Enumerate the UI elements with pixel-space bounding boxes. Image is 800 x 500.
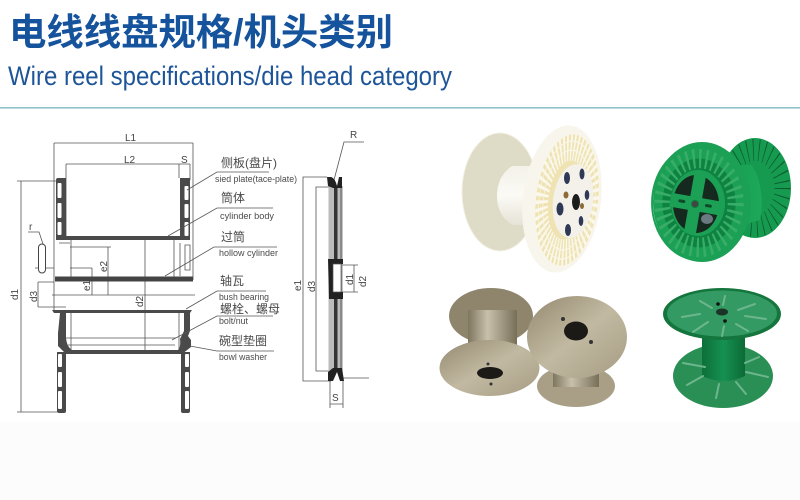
diagram: reel cross-section: d2 — [135, 295, 146, 307]
photo: green plastic reel — [652, 138, 791, 262]
front flange ribs — [652, 146, 746, 260]
diagram: reel cross-section: d3 — [29, 290, 40, 302]
back flange ribs — [728, 150, 782, 226]
diagram: reel cross-section: S — [181, 155, 188, 166]
page background — [0, 422, 800, 500]
left reel front flange — [440, 340, 540, 396]
glimpse through opening — [701, 214, 713, 224]
diagram: reel cross-section: d1 — [10, 288, 21, 300]
lower flange — [673, 344, 773, 408]
back flange — [719, 138, 791, 238]
label: hollow cylinder: 过筒 — [221, 229, 245, 244]
ribbed face — [528, 131, 606, 269]
flange slots — [58, 183, 189, 409]
drum — [702, 335, 745, 381]
leader lines — [165, 172, 277, 351]
label: cylinder body: cylinder body — [220, 211, 275, 221]
label: bowl washer: 碗型垫圈 — [219, 333, 267, 348]
bush bearing — [52, 310, 192, 313]
upper right flange — [180, 178, 190, 240]
diagram: plate section view: d1 — [345, 273, 356, 285]
label: side plate: 侧板(盘片) — [221, 155, 277, 170]
drum — [715, 165, 762, 232]
photo: green metal reel — [663, 288, 781, 408]
hub ring — [671, 170, 725, 236]
top flange — [663, 288, 781, 340]
photo: cream plastic reel — [462, 121, 610, 277]
plate web — [328, 186, 342, 372]
diagram: plate section view — [293, 130, 369, 408]
lower right flange — [181, 352, 190, 413]
diagram: plate section view: S — [332, 393, 339, 404]
diagram: reel cross-section: e1 — [82, 279, 93, 291]
left reel drum — [468, 310, 517, 365]
diagram: reel cross-section: e2 — [99, 260, 110, 272]
title: English: Wire reel specifications/die head category — [8, 61, 452, 91]
diagram: reel cross-section — [10, 133, 195, 413]
section labels: R — [350, 130, 357, 141]
lower left flange — [57, 352, 66, 413]
top lip — [327, 177, 342, 188]
label: bowl washer — [219, 333, 267, 362]
label: bolt/nut: bolt/nut — [219, 316, 248, 326]
label: bush bearing — [219, 273, 269, 302]
centre hole — [572, 194, 580, 210]
diagram: plate section view: d3 — [307, 280, 318, 292]
r slot — [38, 244, 46, 273]
callouts: part names — [165, 155, 297, 362]
label: cylinder body — [220, 190, 275, 221]
diagram: plate section view: d2 — [358, 275, 369, 287]
bottom lip — [328, 368, 344, 381]
brass holes — [564, 192, 584, 209]
dimension labels: L1 — [125, 133, 137, 144]
label: hollow cylinder: hollow cylinder — [219, 248, 278, 258]
label: bolt/nut: 螺栓、螺母 — [220, 301, 280, 316]
left reel back flange — [449, 288, 533, 344]
hub opening — [673, 175, 719, 233]
cylinder body — [62, 236, 184, 240]
hub holes — [716, 308, 728, 316]
label: side plate — [215, 155, 297, 184]
hollow cylinder — [55, 276, 193, 282]
bolt holes — [556, 168, 589, 236]
hub — [328, 259, 343, 299]
label: side plate: sied plate(tace-plate) — [215, 174, 297, 184]
front flange — [514, 121, 610, 277]
right reel lower flange — [537, 365, 615, 407]
hub cross — [665, 170, 725, 238]
pressed ribs — [682, 296, 768, 398]
label: bowl washer: bowl washer — [219, 352, 267, 362]
right reel drum — [553, 365, 599, 387]
front flange — [653, 142, 751, 262]
diagram: reel cross-section: L2 — [124, 155, 136, 166]
lower hub walls — [58, 313, 191, 354]
title: Chinese: 电线线盘规格/机头类别 — [9, 12, 393, 53]
photo: bare metal reels — [440, 288, 627, 407]
header rule — [0, 107, 800, 109]
label: hollow cylinder — [219, 229, 278, 258]
dimension lines — [17, 143, 195, 412]
label: bush bearing: bush bearing — [219, 292, 269, 302]
diagram: plate section view: e1 — [293, 279, 304, 291]
upper left flange — [56, 178, 66, 240]
hub plate — [549, 162, 597, 240]
label: cylinder body: 筒体 — [221, 190, 245, 205]
back flange — [462, 133, 538, 251]
centre hole — [692, 200, 698, 208]
diagram: reel cross-section: r — [29, 222, 33, 233]
label: bolt/nut — [219, 301, 280, 326]
label: bush bearing: 轴瓦 — [220, 273, 244, 288]
right reel top flange — [527, 296, 627, 378]
drum — [497, 166, 545, 225]
section dimension lines — [303, 142, 369, 408]
